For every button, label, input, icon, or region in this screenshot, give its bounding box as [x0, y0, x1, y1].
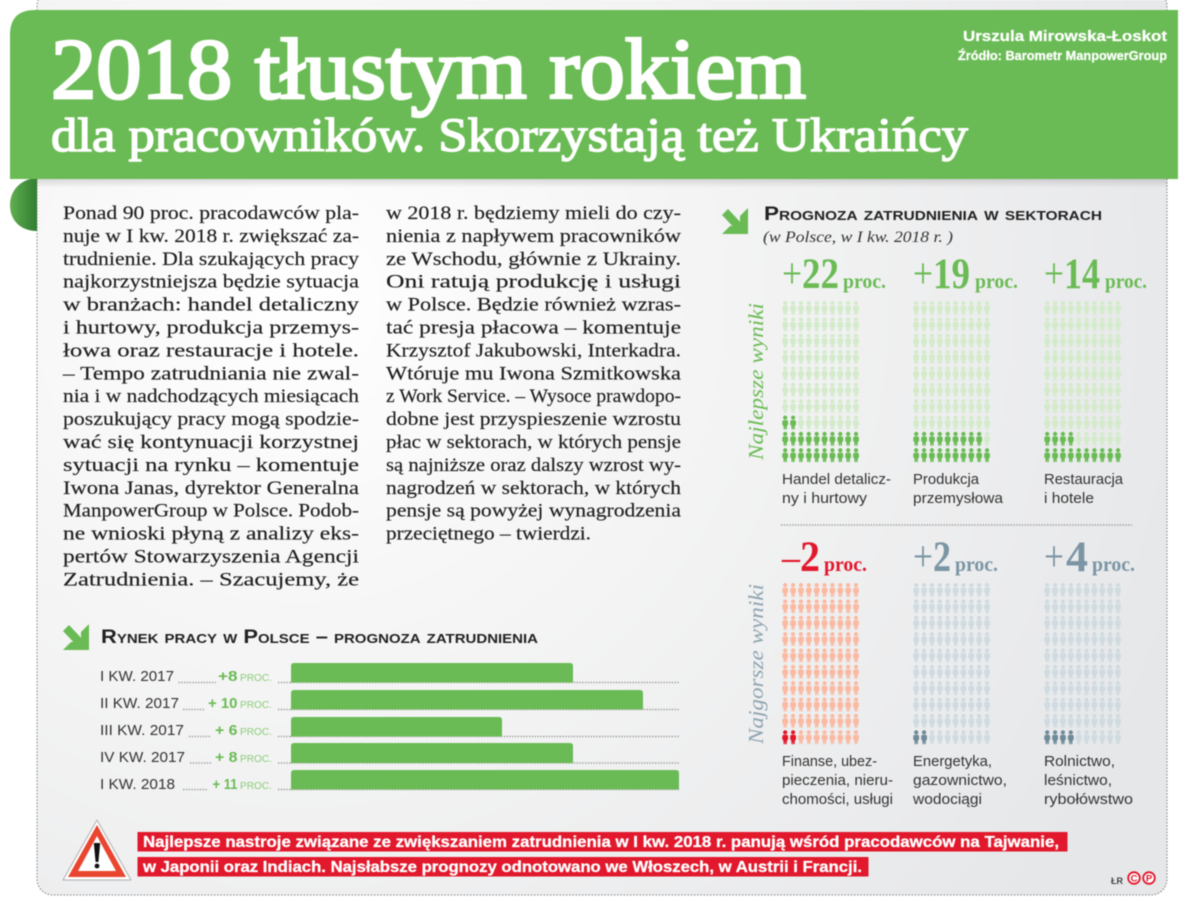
- text block: column 2: dobne jest przyspieszenie wzrostu: [386, 410, 681, 430]
- text block: column 2: tać presja płacowa – komentuje: [386, 318, 681, 338]
- sector: energy +2: 2: [933, 534, 951, 581]
- sector: agriculture +4: +: [1044, 534, 1064, 581]
- text block: column 1: – Tempo zatrudniania nie zwal-: [62, 364, 359, 384]
- sector: agriculture +4: Rolnictwo,: [1044, 754, 1115, 770]
- bar row: IV kw. 2017: [100, 743, 573, 766]
- sector: finance -2: pieczenia, nieru-: [782, 773, 893, 789]
- bar row: I kw. 2018: PROC.: [240, 780, 272, 792]
- sector: retail and wholesale +22: Handel detalicz-: [782, 472, 891, 488]
- text block: column 2: nienia z napływem pracowników: [386, 227, 682, 247]
- icon: green arrow: [722, 208, 748, 234]
- credit and copyright icons: [1111, 872, 1155, 886]
- bar row: II kw. 2017: PROC.: [240, 699, 272, 711]
- subtitle: dla pracowników. Skorzystają też Ukraińcy: [51, 109, 968, 162]
- sector: finance -2: chomości, usługi: [782, 792, 893, 808]
- bar row: II kw. 2017: [100, 690, 643, 712]
- sector: energy +2: proc.: [955, 552, 998, 576]
- text block: column 1: w branżach: handel detaliczny: [63, 296, 360, 316]
- sector: energy +2: Energetyka,: [913, 754, 992, 770]
- text block: column 1: najkorzystniejsza będzie sytuacja: [63, 273, 359, 293]
- credit and copyright icons: C: [1131, 874, 1138, 884]
- text block: column 2: w Polsce. Będzie również wzras-: [386, 296, 681, 316]
- sector: retail and wholesale +22: proc.: [843, 269, 886, 293]
- sector: restaurants and hotels +14: proc.: [1105, 269, 1147, 293]
- sector: manufacturing +19: Produkcja: [913, 472, 980, 488]
- bar row: III kw. 2017: PROC.: [240, 726, 272, 738]
- text block: column 2: [386, 204, 682, 545]
- text block: column 2: przeciętnego – twierdzi.: [386, 525, 591, 545]
- text block: column 1: łowa oraz restauracje i hotele.: [63, 341, 359, 361]
- text block: column 2: Krzysztof Jakubowski, Interkadra.: [386, 341, 681, 361]
- sector: manufacturing +19: [913, 251, 1018, 507]
- bar row: I kw. 2017: PROC.: [240, 672, 272, 684]
- sector: agriculture +4: leśnictwo,: [1044, 773, 1112, 789]
- text block: column 2: ze Wschodu, głównie z Ukrainy.: [386, 250, 681, 270]
- bar row: III kw. 2017: [100, 717, 502, 739]
- text block: column 1: trudnienie. Dla szukających pracy: [63, 250, 360, 270]
- side label: worst results: Najgorsze wyniki: [744, 584, 768, 745]
- sector heading: Prognoza zatrudnienia w sektorach: [764, 204, 1102, 225]
- sector: agriculture +4: 4: [1066, 534, 1088, 581]
- sector: manufacturing +19: 19: [933, 251, 970, 298]
- author: Urszula Mirowska-Łoskot: [963, 28, 1167, 45]
- text block: column 2: nagrodzeń w sektorach, w których: [386, 479, 681, 499]
- bar row: III kw. 2017: + 6: [215, 722, 238, 739]
- bar row: I kw. 2018: + 11: [212, 776, 238, 793]
- sector: restaurants and hotels +14: [1044, 251, 1147, 507]
- sector: restaurants and hotels +14: i hotele: [1044, 491, 1094, 507]
- callout: red note: [138, 832, 1068, 876]
- panel: sector forecast: [722, 204, 1147, 808]
- credit and copyright icons: ŁR: [1111, 876, 1123, 886]
- sector: energy +2: +: [913, 534, 933, 581]
- text block: column 1: Iwona Janas, dyrektor Generalna: [63, 479, 359, 499]
- text block: column 1: ManpowerGroup w Polsce. Podob-: [63, 502, 359, 522]
- callout: red note: w Japonii oraz Indiach. Najsłabsze prognozy odnotowano we Włoszech, w Austrii i Francji.: [142, 859, 862, 876]
- sector: finance -2: proc.: [824, 552, 867, 576]
- banner background: [10, 10, 1178, 179]
- sector: energy +2: [912, 534, 1007, 808]
- bar row: IV kw. 2017: IV KW. 2017: [100, 749, 185, 766]
- bar row: I kw. 2018: [100, 770, 679, 793]
- source: Źródło: Barometr ManpowerGroup: [958, 48, 1167, 63]
- bar row: IV kw. 2017: + 8: [215, 749, 238, 766]
- text block: column 2: Oni ratują produkcję i usługi: [386, 273, 681, 293]
- text block: column 1: sytuacji na rynku – komentuje: [63, 456, 359, 476]
- icon: green arrow: [63, 624, 89, 650]
- sector: energy +2: wodociągi: [912, 792, 982, 808]
- bar row: IV kw. 2017: PROC.: [240, 753, 272, 765]
- sector: restaurants and hotels +14: +: [1044, 251, 1064, 298]
- sector: finance -2: –: [781, 534, 800, 581]
- sector: finance -2: 2: [800, 534, 820, 581]
- sector: retail and wholesale +22: [782, 251, 891, 507]
- header banner: [10, 10, 1178, 231]
- sector: agriculture +4: proc.: [1092, 552, 1135, 576]
- text block: column 2: płac w sektorach, w których pensje: [386, 433, 681, 453]
- text block: column 1: Ponad 90 proc. pracodawców pla-: [63, 204, 359, 224]
- text block: column 2: pensje są powyżej wynagrodzenia: [386, 502, 681, 522]
- sector: restaurants and hotels +14: 14: [1064, 251, 1100, 298]
- text block: column 1: nia i w nadchodzących miesiącach: [63, 387, 359, 407]
- bar row: I kw. 2017: +8: [218, 668, 238, 685]
- sector: restaurants and hotels +14: Restauracja: [1044, 472, 1124, 488]
- chart heading: Rynek pracy w Polsce – prognoza zatrudnienia: [101, 627, 539, 648]
- panel: bar chart labour market: [63, 624, 680, 793]
- bar row: I kw. 2018: I KW. 2018: [100, 776, 175, 793]
- sector: agriculture +4: rybołówstwo: [1044, 792, 1133, 808]
- text block: column 1: nuje w I kw. 2018 r. zwiększać za-: [63, 227, 359, 247]
- sector: manufacturing +19: proc.: [975, 269, 1018, 293]
- sector: manufacturing +19: przemysłowa: [913, 491, 1004, 507]
- sector: retail and wholesale +22: 22: [802, 251, 839, 298]
- bar row: II kw. 2017: II KW. 2017: [100, 695, 179, 712]
- sector: manufacturing +19: +: [913, 251, 933, 298]
- text block: column 1: Zatrudnienia. – Szacujemy, że: [63, 570, 359, 590]
- sector subheading: (w Polsce, w I kw. 2018 r. ): [763, 229, 953, 246]
- sector: finance -2: Finanse, ubez-: [782, 754, 877, 770]
- bar row: I kw. 2017: [100, 663, 573, 685]
- text block: column 1: i hurtowy, produkcja przemys-: [63, 318, 359, 338]
- sector: energy +2: gazownictwo,: [913, 773, 1007, 789]
- icon: warning triangle: [63, 820, 131, 880]
- text block: column 1: [62, 204, 360, 590]
- text block: column 1: ne wnioski płyną z analizy eks-: [63, 525, 359, 545]
- text block: column 2: w 2018 r. będziemy mieli do czy-: [386, 204, 681, 224]
- title: 2018 tłustym rokiem: [51, 21, 806, 117]
- sector: retail and wholesale +22: +: [782, 251, 802, 298]
- bar row: III kw. 2017: III KW. 2017: [100, 722, 184, 739]
- bar row: II kw. 2017: + 10: [208, 695, 238, 712]
- credit and copyright icons: P: [1146, 874, 1153, 884]
- banner fold: [10, 178, 37, 231]
- text block: column 1: wać się kontynuacji korzystnej: [63, 433, 359, 453]
- text block: column 1: pertów Stowarzyszenia Agencji: [63, 548, 359, 568]
- sector: retail and wholesale +22: ny i hurtowy: [782, 491, 868, 507]
- text block: column 2: z Work Service. – Wysoce prawdopo-: [386, 387, 681, 407]
- text block: column 2: Wtóruje mu Iwona Szmitkowska: [386, 364, 681, 384]
- text block: column 2: są najniższe oraz dalszy wzrost wy-: [386, 456, 681, 476]
- sector: finance -2: [781, 534, 893, 808]
- text block: column 1: poszukujący pracy mogą spodzie-: [63, 410, 359, 430]
- sector: agriculture +4: [1044, 534, 1135, 808]
- side label: best results: Najlepsze wyniki: [744, 303, 768, 461]
- bar row: I kw. 2017: I KW. 2017: [100, 668, 174, 685]
- callout: red note: Najlepsze nastroje związane ze zwiększaniem zatrudnienia w I kw. 2018 r. panują wśród pracodawców na Tajwanie,: [143, 834, 1059, 851]
